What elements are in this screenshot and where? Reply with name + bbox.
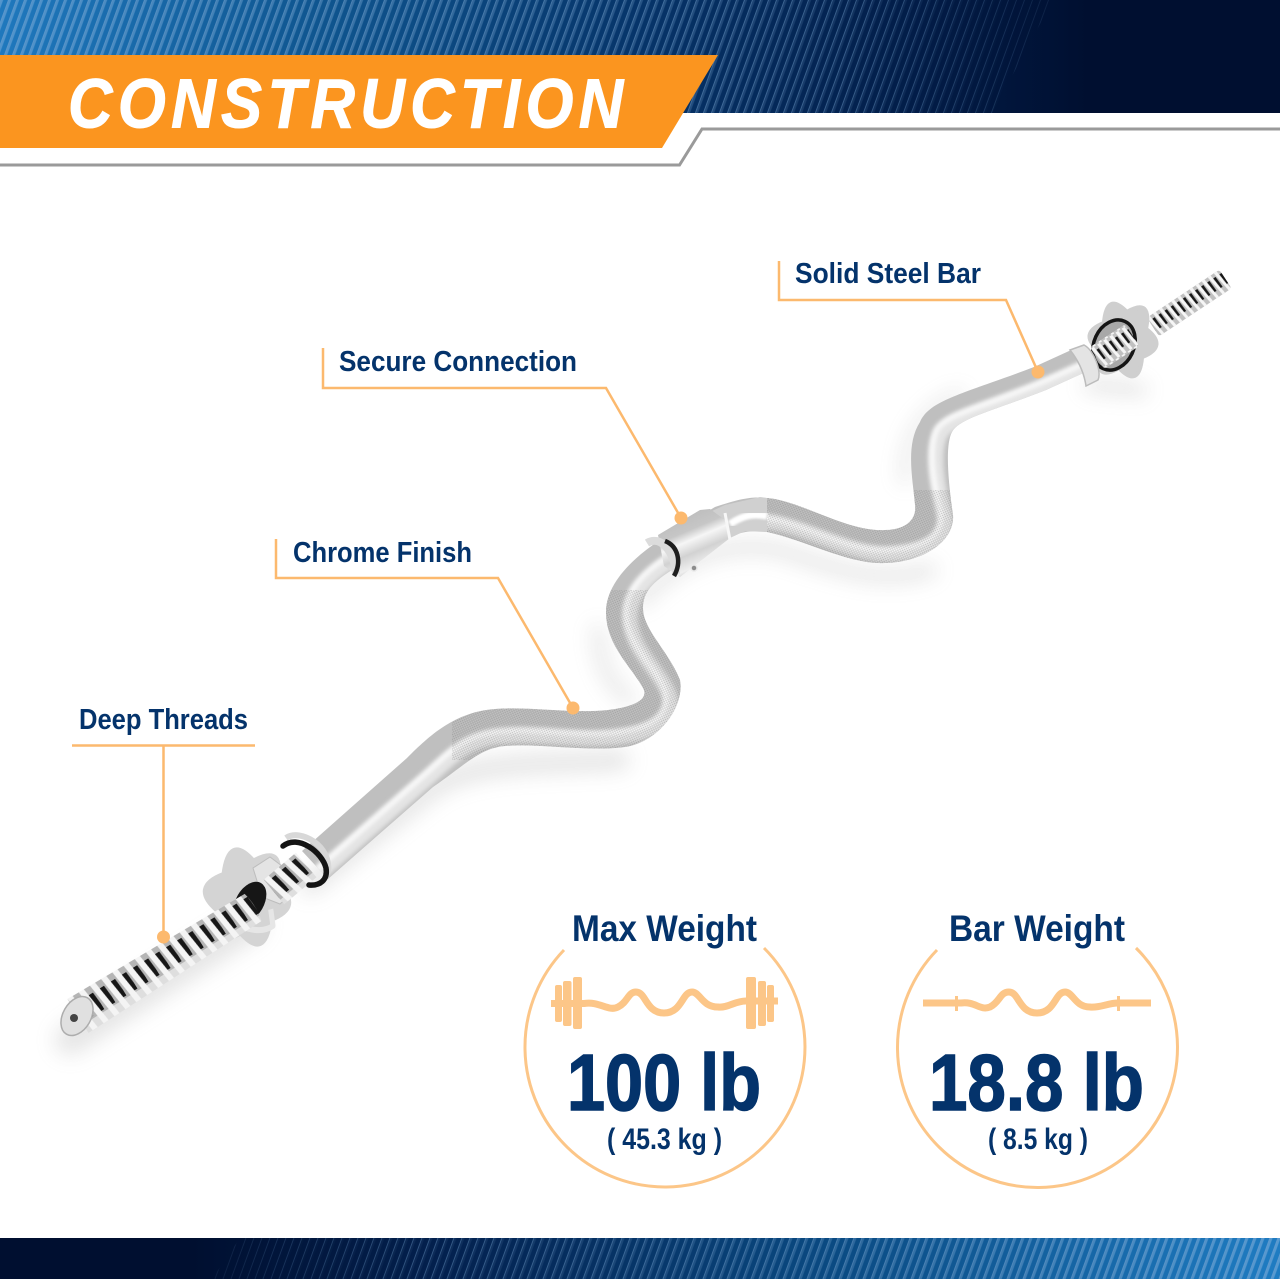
right end flange	[1070, 345, 1099, 386]
stat heading: Max Weight	[572, 908, 757, 949]
stat heading: Bar Weight	[949, 908, 1125, 949]
curl bar product illustration	[54, 270, 1232, 1041]
rubber ring on left collar	[283, 835, 328, 885]
deep threads, left end	[54, 889, 265, 1041]
shadow beneath the bar	[70, 385, 1140, 1040]
bottom banner: diagonal stripes	[0, 1238, 1280, 1279]
stat value: 100 lb	[567, 1038, 761, 1127]
callout: Chrome Finish	[276, 537, 580, 714]
stat: Max Weight	[525, 908, 805, 1187]
right threaded end	[1070, 270, 1232, 386]
left collar hub	[253, 857, 296, 904]
circle arc	[897, 948, 1177, 1187]
stat metric value: ( 8.5 kg )	[988, 1123, 1088, 1156]
thread tip face	[54, 991, 100, 1041]
right inner thread	[1090, 324, 1139, 369]
right collar star	[1085, 301, 1161, 379]
circle arc	[525, 948, 805, 1187]
top banner: blue gradient with diagonal stripes	[0, 0, 1280, 113]
callout: Deep Threads: Deep Threads	[79, 704, 248, 736]
right thread tip	[1147, 270, 1232, 336]
callout: Solid Steel Bar	[779, 258, 1044, 378]
stat value: 18.8 lb	[929, 1038, 1144, 1127]
callout: Chrome Finish: Chrome Finish	[293, 537, 472, 569]
stat: Bar Weight	[897, 908, 1177, 1187]
callout: Secure Connection	[323, 346, 688, 524]
knurled grip texture	[452, 490, 959, 760]
stat metric value: ( 45.3 kg )	[607, 1123, 722, 1156]
title: CONSTRUCTION	[68, 64, 625, 142]
right black ring	[1085, 313, 1143, 377]
black ring behind left threads	[227, 876, 273, 928]
left collar star	[198, 846, 296, 948]
callout: Deep Threads	[72, 704, 255, 944]
steel tube with shading	[302, 346, 1094, 880]
connecting sleeve	[647, 497, 767, 577]
callout: Solid Steel Bar: Solid Steel Bar	[795, 258, 981, 290]
callout: Secure Connection: Secure Connection	[339, 346, 577, 378]
grey outline under title tab	[0, 129, 1280, 165]
icon: bare curl bar	[923, 992, 1151, 1013]
left inner threads between hub and ring	[264, 853, 316, 904]
title tab	[0, 55, 718, 148]
icon: loaded curl barbell	[551, 977, 778, 1029]
